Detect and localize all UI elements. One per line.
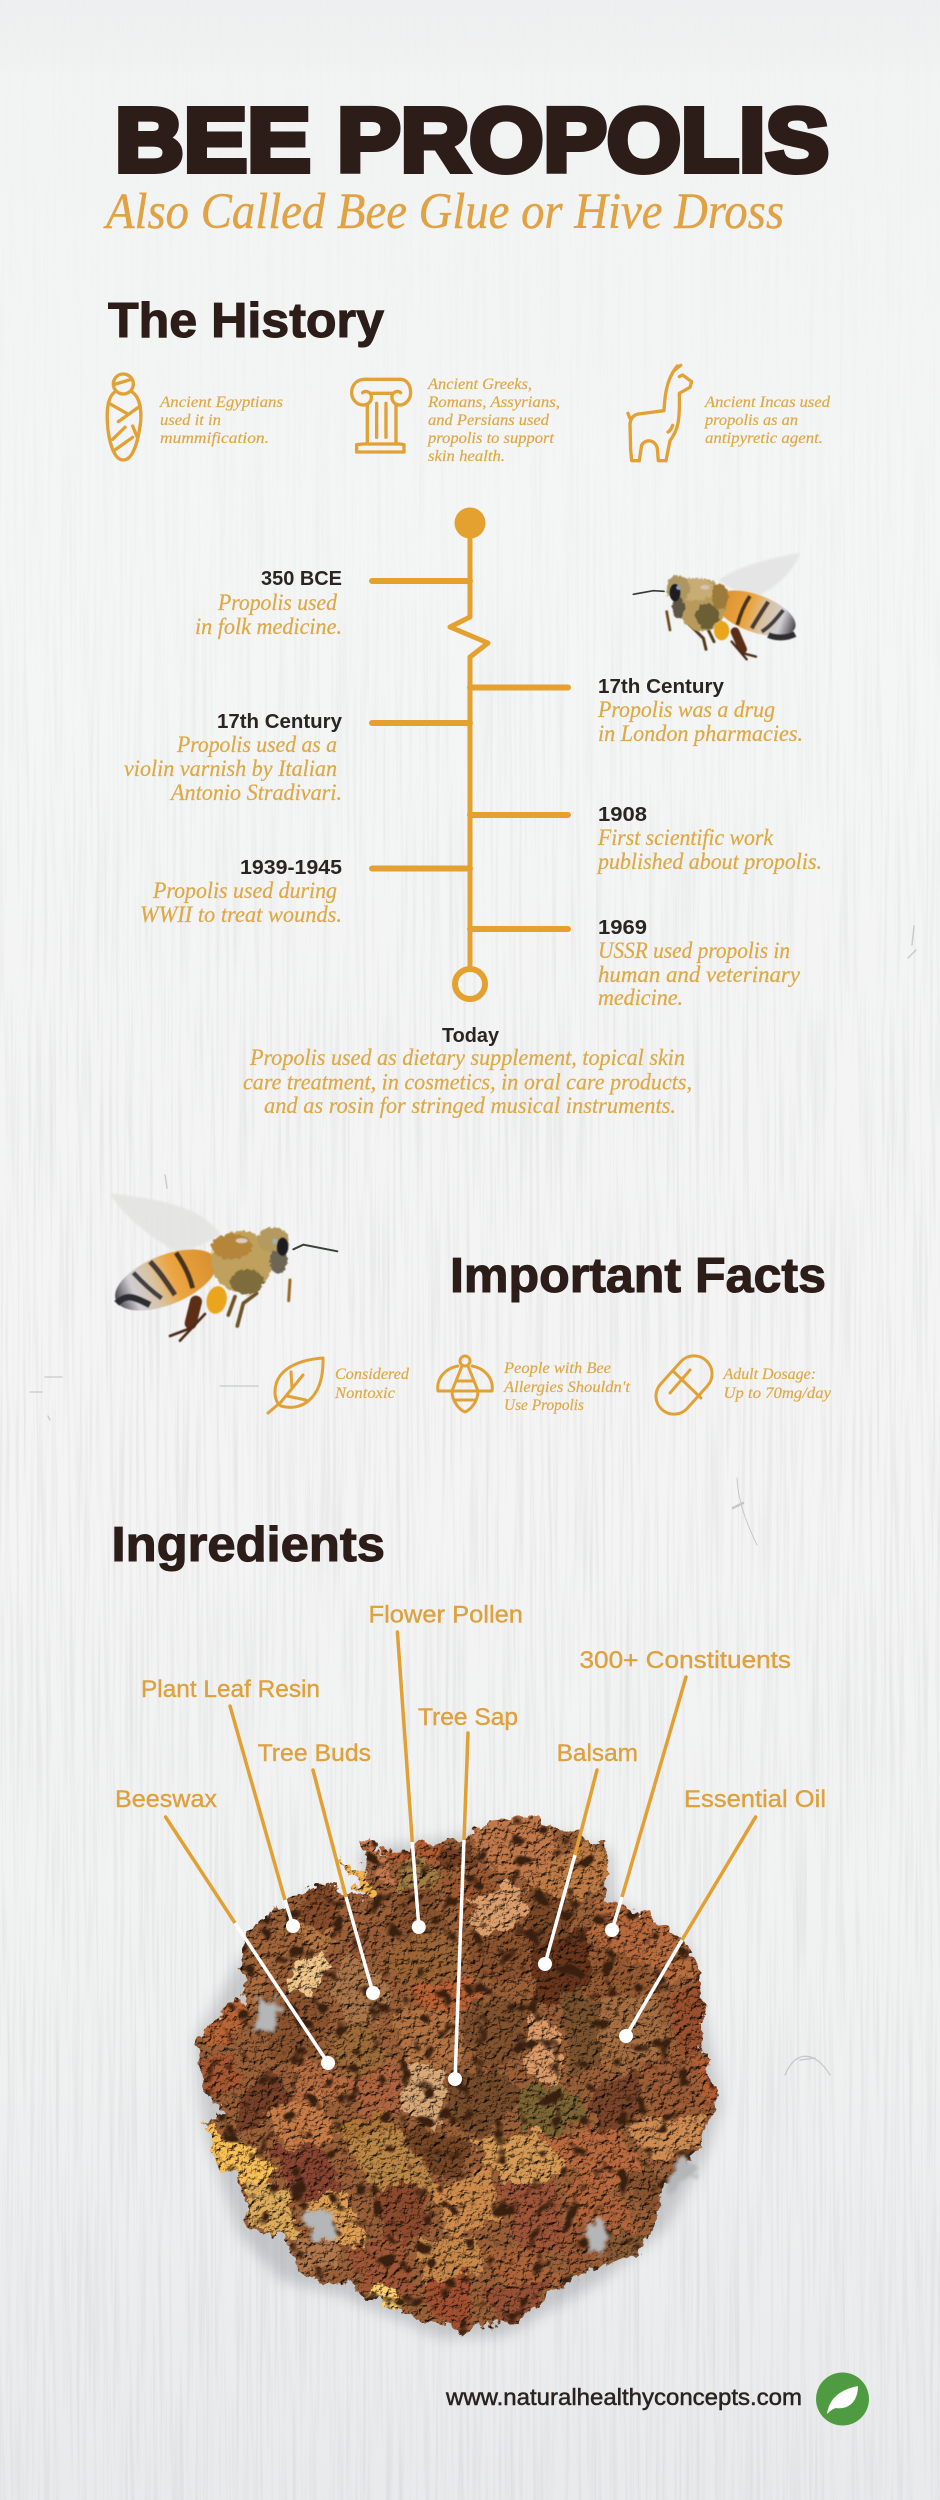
entry: today: Today <box>442 1024 500 1047</box>
gaps between fragments <box>255 1998 696 2260</box>
entry: 1908: published about propolis. <box>596 849 822 874</box>
callout: beeswax <box>115 1786 335 2070</box>
callout: 300+ constituents <box>580 1647 791 1937</box>
entry: today: Propolis used as dietary supplement, topical skin <box>249 1045 685 1070</box>
callout: balsam <box>538 1740 638 1971</box>
entry: 17th century drug <box>597 675 803 746</box>
chart: ingredient callouts <box>115 1602 826 2086</box>
text: greeks and romans: propolis to support <box>427 430 555 447</box>
entry: 350 BCE: 350 BCE <box>261 567 342 590</box>
entry: 1908: 1908 <box>598 803 647 826</box>
icon: leaf <box>268 1358 323 1413</box>
callout: 300+ constituents: 300+ Constituents <box>580 1647 791 1674</box>
icon: llama <box>628 365 692 461</box>
entry: 17th century violin: violin varnish by Italian <box>124 756 337 781</box>
callout: plant leaf resin: Plant Leaf Resin <box>141 1676 320 1703</box>
footer url: www.naturalhealthyconcepts.com <box>445 2384 802 2410</box>
panel: facts row <box>268 1348 832 1422</box>
entry: 1969: human and veterinary <box>598 962 801 987</box>
icon: pill <box>649 1348 719 1422</box>
entry: 350 BCE: Propolis used <box>217 590 337 615</box>
entry: today: care treatment, in cosmetics, in oral care products, <box>243 1070 692 1094</box>
text: greeks and romans <box>427 376 560 465</box>
entry: 1939-1945 <box>140 856 342 927</box>
timeline branches <box>372 581 568 929</box>
text: egyptians: mummification. <box>160 430 269 447</box>
entry: 350 BCE <box>195 567 342 639</box>
entry: 17th century drug: 17th Century <box>598 675 725 698</box>
text: nontoxic: Considered <box>335 1366 410 1383</box>
entry: 17th century violin: 17th Century <box>217 710 343 733</box>
text: incas: propolis as an <box>704 412 798 429</box>
text: incas: antipyretic agent. <box>705 430 823 447</box>
entry: 1969 <box>598 916 801 1010</box>
icon: bee <box>438 1356 492 1412</box>
callout: tree buds: Tree Buds <box>258 1740 371 1767</box>
entry: 1908: First scientific work <box>597 825 774 850</box>
heading: important facts: Important Facts <box>450 1249 826 1303</box>
text: egyptians: used it in <box>160 412 221 429</box>
entry: 17th century violin <box>124 710 343 805</box>
text: allergies: Allergies Shouldn't <box>503 1379 631 1396</box>
icon: leaf logo <box>816 2372 869 2426</box>
wood background <box>0 846 940 2500</box>
callout: flower pollen: Flower Pollen <box>368 1602 523 1629</box>
entry: 1969: 1969 <box>598 916 647 939</box>
chart: timeline <box>124 508 822 1118</box>
entry: 17th century drug: Propolis was a drug <box>597 697 775 722</box>
entry: 17th century drug: in London pharmacies. <box>598 721 803 746</box>
illustration: flying bee right <box>633 553 801 659</box>
text: egyptians: Ancient Egyptians <box>159 394 283 411</box>
text: allergies <box>503 1360 631 1414</box>
entry: today <box>243 1024 692 1118</box>
text: incas <box>704 394 831 447</box>
entry: 1939-1945: 1939-1945 <box>240 856 342 879</box>
entry: 1939-1945: WWII to treat wounds. <box>140 902 342 927</box>
text: dosage: Adult Dosage: <box>723 1366 816 1383</box>
text: allergies: Use Propolis <box>504 1397 584 1414</box>
entry: 1969: USSR used propolis in <box>598 938 790 963</box>
illustration: propolis pile <box>195 1818 722 2338</box>
text: greeks and romans: and Persians used <box>428 412 550 429</box>
text: nontoxic: Nontoxic <box>334 1385 395 1402</box>
entry: 17th century violin: Antonio Stradivari. <box>169 780 342 805</box>
entry: 1969: medicine. <box>598 985 683 1010</box>
entry: 350 BCE: in folk medicine. <box>195 614 342 639</box>
callout: tree sap <box>418 1704 518 2086</box>
callout: essential oil <box>619 1786 826 2043</box>
heading: the history: The History <box>108 294 384 348</box>
callout: balsam: Balsam <box>557 1740 638 1767</box>
text: greeks and romans: Romans, Assyrians, <box>427 394 560 411</box>
icon: ionic column <box>352 379 411 452</box>
subtitle: Also Called Bee Glue or Hive Dross <box>103 184 784 240</box>
callout: plant leaf resin <box>141 1676 320 1933</box>
illustration: flying bee left <box>107 1193 337 1341</box>
callout: tree buds <box>258 1740 380 2000</box>
text: dosage: Up to 70mg/day <box>724 1385 832 1402</box>
text: nontoxic <box>334 1366 410 1402</box>
timeline axis <box>450 508 488 999</box>
callout: flower pollen <box>368 1602 523 1934</box>
heading: ingredients: Ingredients <box>112 1518 385 1572</box>
text: greeks and romans: skin health. <box>428 448 505 465</box>
title: BEE PROPOLIS <box>115 91 829 191</box>
text: allergies: People with Bee <box>503 1360 611 1377</box>
panel: ancient cultures row <box>107 365 831 465</box>
text: egyptians <box>159 394 283 447</box>
text: incas: Ancient Incas used <box>704 394 831 411</box>
entry: 1939-1945: Propolis used during <box>152 878 337 903</box>
entry: today: and as rosin for stringed musical instruments. <box>264 1093 676 1118</box>
text: dosage <box>723 1366 832 1402</box>
text: greeks and romans: Ancient Greeks, <box>427 376 532 393</box>
callout: beeswax: Beeswax <box>115 1786 217 1813</box>
icon: mummy <box>107 374 141 460</box>
callout: tree sap: Tree Sap <box>418 1704 518 1731</box>
callout: essential oil: Essential Oil <box>684 1786 826 1813</box>
entry: 1908 <box>596 803 822 874</box>
entry: 17th century violin: Propolis used as a <box>176 732 337 757</box>
